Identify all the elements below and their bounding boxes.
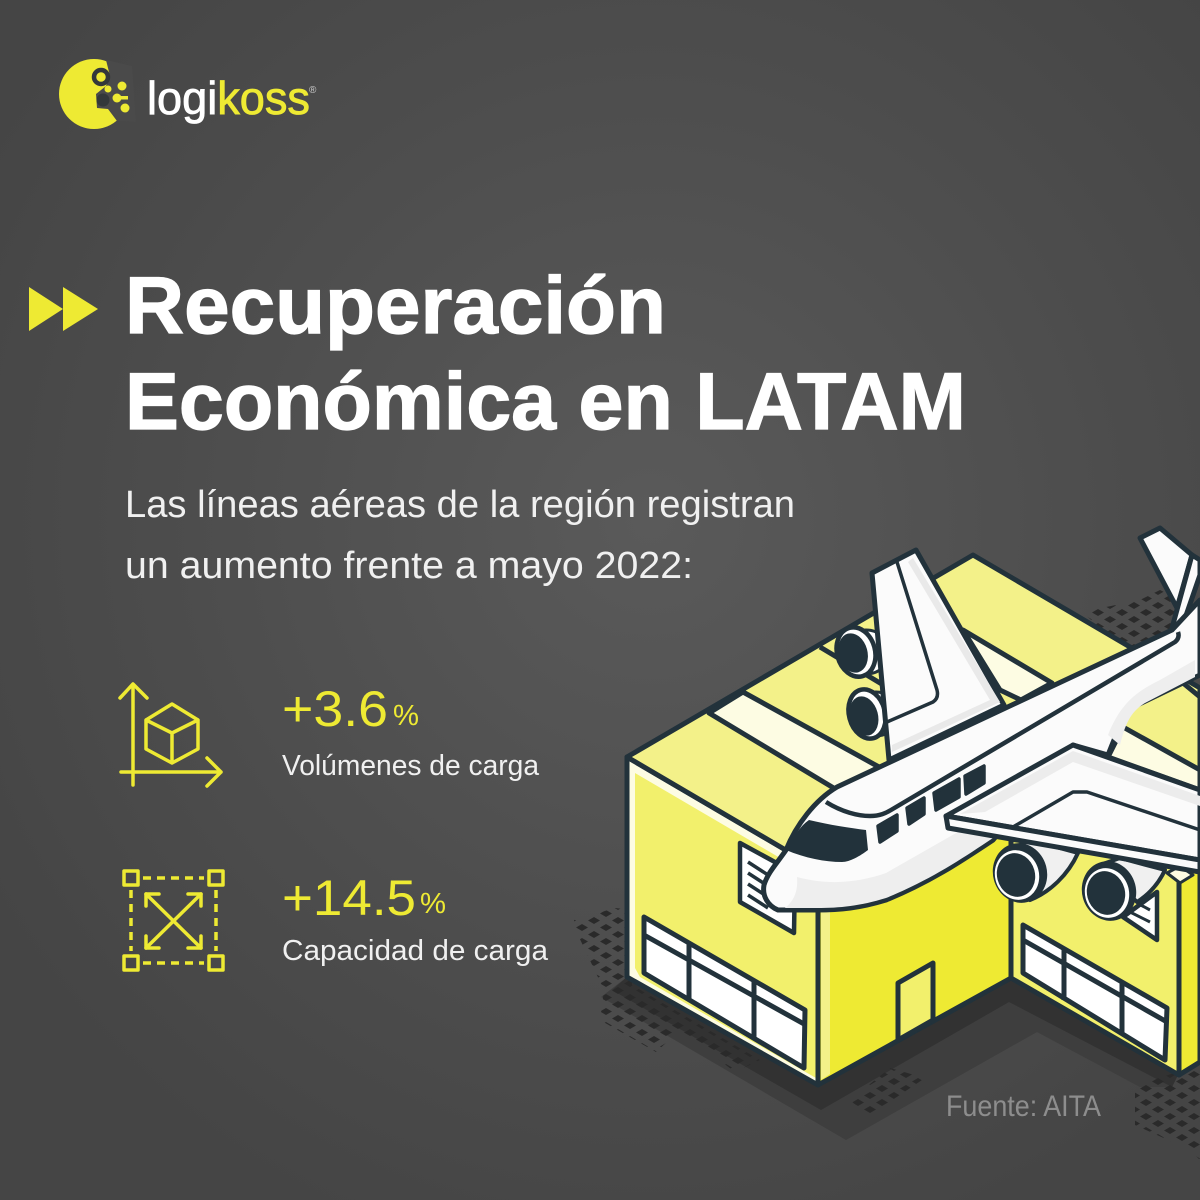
second block left wall	[1011, 762, 1179, 1075]
halftone dot shadows	[574, 590, 1200, 1160]
left wall	[627, 757, 818, 1085]
second block right wall	[1179, 848, 1200, 1075]
subtitle: Las líneas aéreas de la región registran	[125, 484, 795, 526]
source: Fuente: AITA	[946, 1090, 1101, 1123]
near engines	[986, 837, 1165, 927]
illustration: warehouse and airplane	[574, 528, 1200, 1160]
cockpit windshield	[786, 820, 868, 862]
roof	[627, 555, 1200, 869]
cabin windows	[878, 766, 984, 842]
cheat line	[826, 632, 1179, 816]
stat: cargo capacity: +14.5	[282, 870, 416, 926]
icon: cube on axes	[120, 684, 221, 786]
title: Recuperación	[125, 261, 666, 351]
stat: cargo volume: %	[393, 700, 419, 732]
logo wordmark: logikoss	[147, 72, 310, 124]
ground shadow	[601, 977, 1178, 1140]
stat: cargo capacity: %	[420, 888, 446, 920]
door	[898, 963, 933, 1040]
far engines	[831, 623, 898, 743]
title	[125, 261, 966, 447]
stat: cargo volume: Volúmenes de carga	[282, 750, 540, 782]
stat: cargo volume: +3.6	[282, 681, 388, 737]
subtitle: un aumento frente a mayo 2022:	[125, 545, 693, 587]
subtitle	[125, 484, 795, 587]
roof packing tape stripes	[709, 630, 1200, 790]
windows left	[644, 917, 805, 1068]
wall label left	[740, 843, 795, 933]
near wing	[946, 745, 1200, 872]
registered mark: ®	[309, 85, 317, 96]
front wall	[818, 762, 1011, 1085]
icon: expanding capacity box	[124, 871, 223, 970]
roof corner highlight	[1167, 866, 1193, 883]
title: Económica en LATAM	[125, 357, 966, 447]
logo mark	[59, 59, 136, 129]
fast-forward arrow icon	[29, 287, 98, 331]
stat: cargo capacity: Capacidad de carga	[282, 935, 549, 967]
far wing	[872, 550, 1004, 760]
stat: cargo capacity	[282, 870, 549, 967]
stat: cargo volume	[282, 681, 540, 782]
tail	[1140, 528, 1200, 633]
windows right	[1023, 925, 1167, 1060]
fuselage	[764, 600, 1200, 910]
wall label right	[1123, 892, 1157, 940]
logo	[59, 59, 317, 129]
